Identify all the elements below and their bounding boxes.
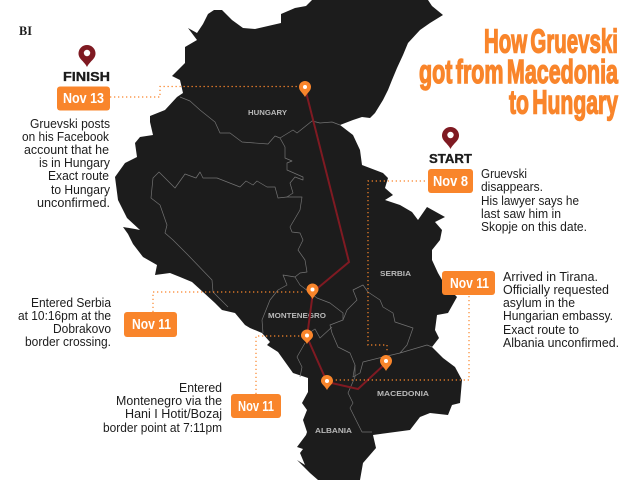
start text: disappears. (481, 180, 543, 194)
finish heading: FINISH (63, 70, 110, 84)
start text: Skopje on this date. (481, 220, 587, 234)
date badge: Nov 11 Serbia: Nov 11 (132, 317, 171, 333)
dotted leader lines (110, 86, 469, 394)
start text: His lawyer says he (481, 194, 579, 208)
Serbia text: border crossing. (25, 335, 111, 349)
Albania text: Arrived in Tirana. (503, 270, 598, 284)
Montenegro text: Entered (179, 381, 222, 395)
finish text: Exact route (48, 169, 109, 183)
BI logo: BI (19, 23, 32, 38)
finish text: Gruevski posts (30, 117, 110, 131)
finish text (22, 117, 111, 210)
date badge: Nov 13 (57, 86, 110, 110)
Serbia text: Entered Serbia (31, 296, 111, 310)
country labels: HUNGARY (248, 108, 287, 117)
Montenegro text (103, 381, 222, 435)
Montenegro text: Hani I Hotit/Bozaj (125, 407, 222, 421)
finish text: to Hungary (51, 183, 111, 197)
map of the Balkans (115, 0, 462, 480)
callout: arrived in Tirana (442, 270, 619, 350)
date badge: Nov 8: Nov 8 (433, 174, 468, 190)
date badge: Nov 11 Montenegro: Nov 11 (238, 399, 274, 415)
callout: entered Montenegro (103, 381, 281, 435)
Serbia text: Dobrakovo (53, 322, 111, 336)
Albania text: Exact route to (503, 323, 579, 337)
Albania text (503, 270, 619, 350)
Albania text: Albania unconfirmed. (503, 336, 619, 350)
start heading: START (429, 152, 472, 166)
landmass (115, 0, 462, 480)
finish text: on his Facebook (22, 130, 110, 144)
callout: finish (22, 45, 111, 210)
Serbia text (18, 296, 111, 349)
start text: last saw him in (481, 207, 561, 221)
finish text: is in Hungary (39, 156, 111, 170)
route line (305, 88, 386, 389)
country labels (248, 108, 430, 435)
Albania text: asylum in the (503, 296, 575, 310)
route pins (299, 81, 392, 390)
Serbia text: at 10:16pm at the (18, 309, 111, 323)
finish text: unconfirmed. (37, 196, 110, 210)
date badge: Nov 11 Serbia (124, 312, 177, 337)
country labels: MONTENEGRO (268, 311, 326, 320)
date badge: Nov 11 Albania (442, 271, 495, 295)
title (419, 22, 618, 120)
date badge: Nov 11 Montenegro (231, 394, 281, 418)
icon: finish pin (78, 45, 96, 67)
date badge: Nov 8 (428, 169, 473, 193)
date badge: Nov 13: Nov 13 (63, 91, 104, 107)
Albania text: Hungarian embassy. (503, 309, 613, 323)
Montenegro text: Montenegro via the (116, 394, 222, 408)
country labels: ALBANIA (315, 426, 353, 435)
date badge: Nov 11 Albania: Nov 11 (450, 276, 489, 292)
Montenegro text: border point at 7:11pm (103, 421, 222, 435)
icon: start pin (442, 127, 459, 149)
start text: Gruevski (481, 167, 527, 181)
country borders (151, 97, 432, 432)
country labels: MACEDONIA (377, 389, 430, 398)
Albania text: Officially requested (503, 283, 609, 297)
finish text: account that he (24, 143, 109, 157)
country labels: SERBIA (380, 269, 412, 278)
callout: start (428, 127, 587, 234)
start text (481, 167, 587, 234)
callout: entered Serbia (18, 296, 177, 349)
